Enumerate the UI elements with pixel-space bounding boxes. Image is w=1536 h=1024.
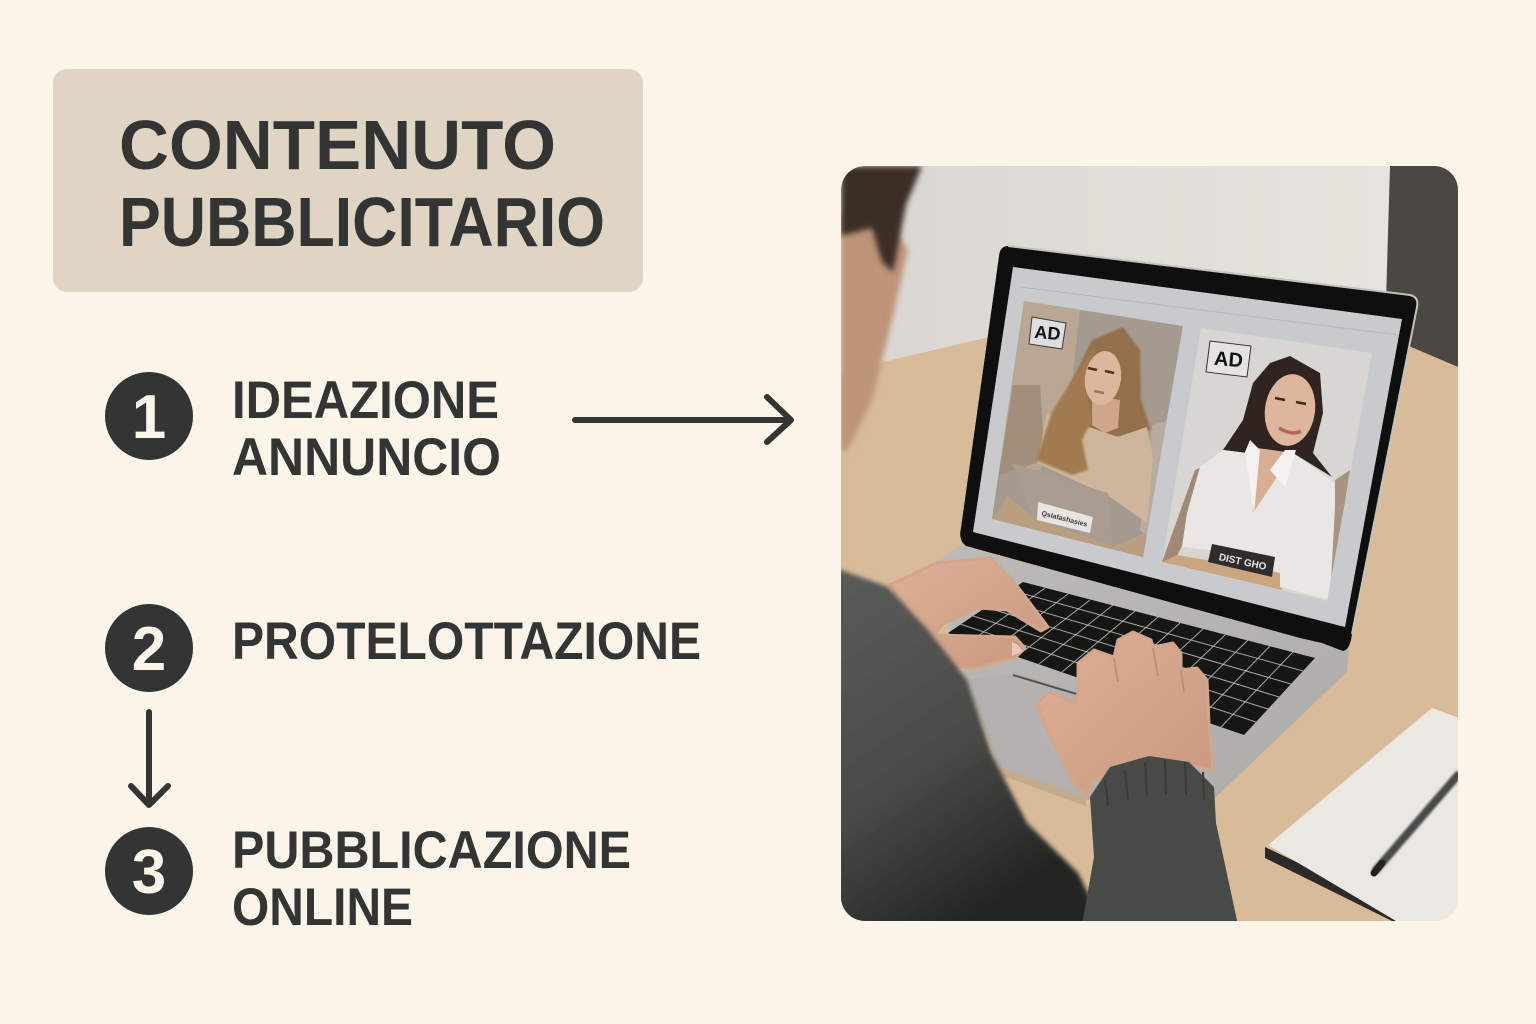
step 1: ideazione annuncio: 1 [132,383,166,452]
ad 1 badge: AD [1034,322,1061,344]
screen display [973,267,1402,627]
ad 1 badge [1029,317,1066,349]
ad 2 badge [1206,341,1251,377]
step 2: protelottazione: 2 [132,615,166,684]
ad 2 caption: DIST GHO [1218,552,1268,573]
step 3: pubblicazione online: 3 [132,838,166,907]
step 2: protelottazione [105,604,701,692]
ad 1 neck [1092,395,1120,433]
wooden table [841,336,1458,921]
title heading: PUBBLICITARIO [119,183,605,261]
sweater sleeve and cuff [1082,756,1238,925]
notebook with pen [1265,708,1470,921]
ad 1: woman with laptop [992,301,1183,557]
laptop [930,246,1417,806]
step 3: pubblicazione online: ONLINE [232,878,413,937]
step 1: ideazione annuncio [105,371,501,487]
ad 1 caption: Qslafashasies [1041,510,1088,529]
step 1: ideazione annuncio: ANNUNCIO [232,428,501,487]
ad 1 front hair [1036,345,1095,475]
title panel [53,69,643,292]
step 2: protelottazione: PROTELOTTAZIONE [232,612,701,671]
ad 2: smiling woman [1155,325,1380,605]
laptop base [930,545,1349,800]
sweater torso [835,568,1104,925]
step 1: ideazione annuncio: IDEAZIONE [232,371,499,430]
ad 2 badge: AD [1213,348,1244,372]
left hand on keyboard [890,558,1048,668]
right hand on keyboard [1037,632,1213,797]
photo: person typing on a laptop showing ads [835,166,1470,925]
ad 1 sweater [1037,413,1153,523]
title heading: CONTENUTO [119,106,556,184]
step 3: pubblicazione online [105,821,631,937]
title heading [119,106,605,261]
ad 1 back hair [1072,326,1152,437]
ad 1 caption [1037,502,1093,533]
ad 2 caption [1208,544,1275,577]
step 3: pubblicazione online: PUBBLICAZIONE [232,821,631,880]
keyboard [948,582,1315,735]
arrow: step 2 to step 3 [131,712,168,805]
screen bezel [960,246,1417,651]
person's head [841,166,922,452]
arrow: step 1 to photo [575,397,791,442]
